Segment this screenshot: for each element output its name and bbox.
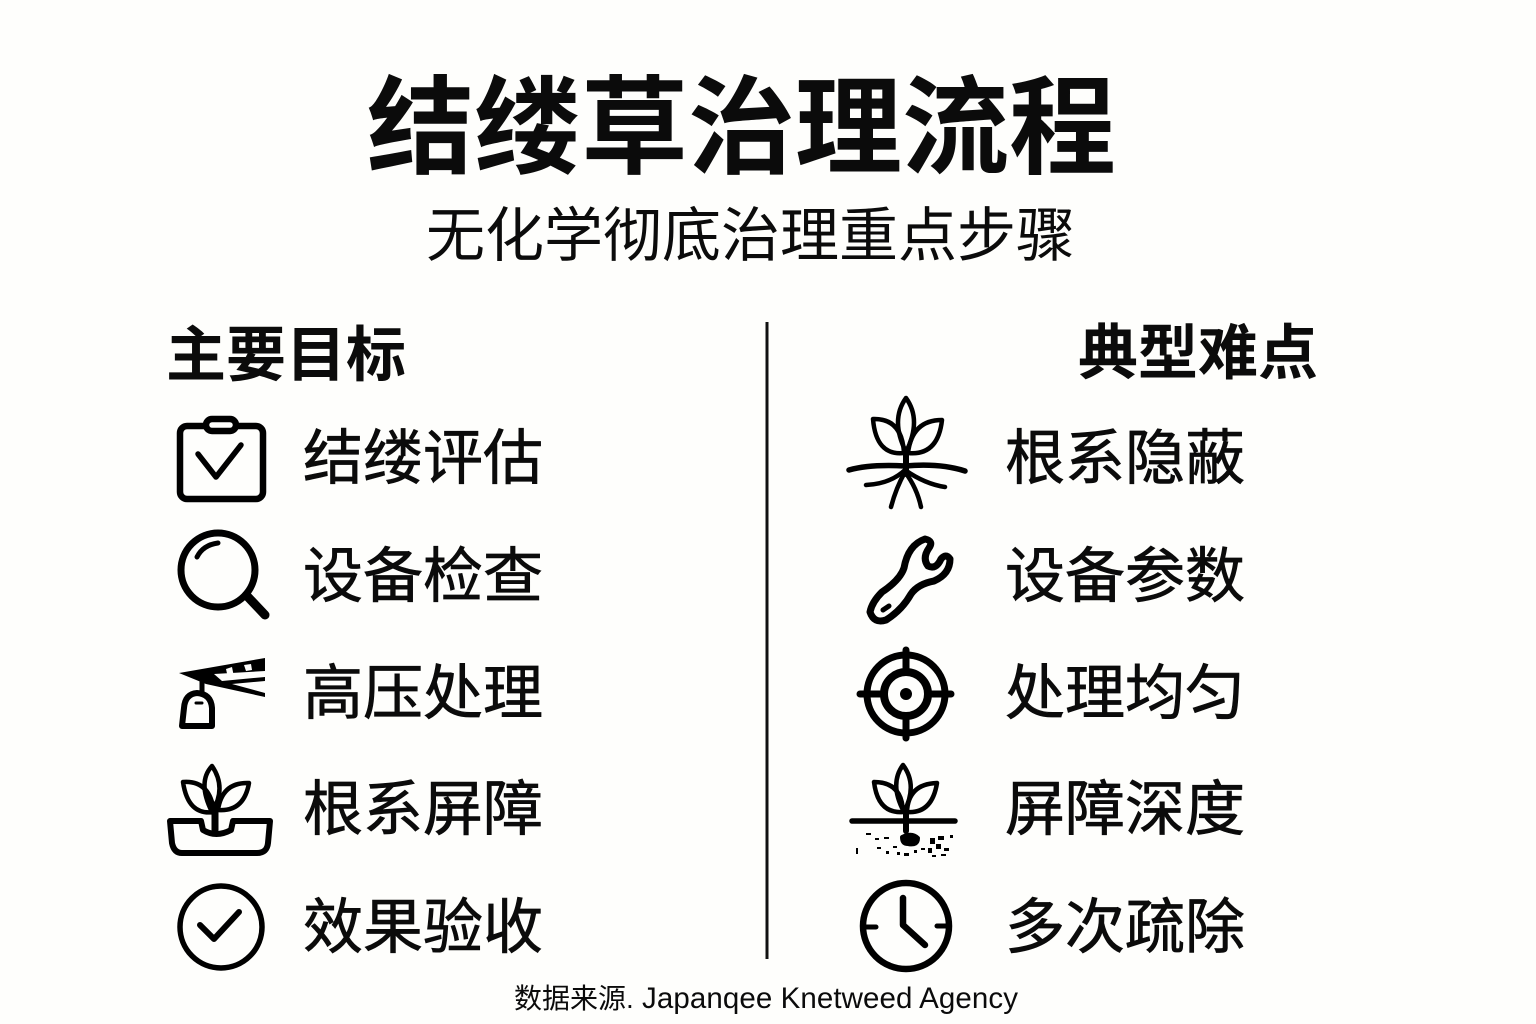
heading: typical difficulties: 典型难点 <box>1078 320 1318 387</box>
row: repeated treatment <box>863 883 1245 969</box>
label: 结缕评估 <box>303 425 543 492</box>
row: assessment <box>180 419 543 499</box>
row: root barrier <box>170 766 543 853</box>
panel: main goals <box>166 322 543 968</box>
icon: clipboard check <box>180 419 263 499</box>
row: equipment parameters <box>870 539 1245 621</box>
label: 设备参数 <box>1005 543 1245 610</box>
icon: check circle <box>180 886 262 968</box>
icon: plant with roots <box>849 398 965 507</box>
icon: plant in tray <box>170 766 270 853</box>
heading: main goals: 主要目标 <box>166 322 406 389</box>
label: 多次疏除 <box>1005 894 1245 961</box>
subtitle: 无化学彻底治理重点步骤 <box>426 203 1075 269</box>
icon: sprayer <box>179 658 265 726</box>
label: 根系屏障 <box>303 776 543 843</box>
label: 设备检查 <box>303 543 543 610</box>
icon: wrench <box>870 539 950 621</box>
row: equipment check <box>181 533 543 615</box>
icon: clock <box>863 883 949 969</box>
center divider <box>766 322 768 959</box>
row: hidden roots <box>849 398 1245 507</box>
panel: typical difficulties <box>849 320 1318 969</box>
icon: target <box>860 650 951 738</box>
icon: magnifier <box>181 533 265 615</box>
footer: Japanqee Knetweed Agency <box>642 982 1018 1015</box>
row: uniform treatment <box>860 650 1245 738</box>
icon: plant and soil <box>852 765 955 857</box>
label: 根系隐蔽 <box>1005 425 1245 492</box>
row: high pressure <box>179 658 543 727</box>
title: 结缕草治理流程 <box>367 68 1116 188</box>
row: barrier depth <box>852 765 1245 857</box>
label: 效果验收 <box>303 894 543 961</box>
label: 屏障深度 <box>1005 776 1245 843</box>
row: verification <box>180 886 543 968</box>
label: 高压处理 <box>303 660 543 727</box>
label: 处理均匀 <box>1005 660 1245 727</box>
footer: 数据来源. <box>514 983 634 1014</box>
